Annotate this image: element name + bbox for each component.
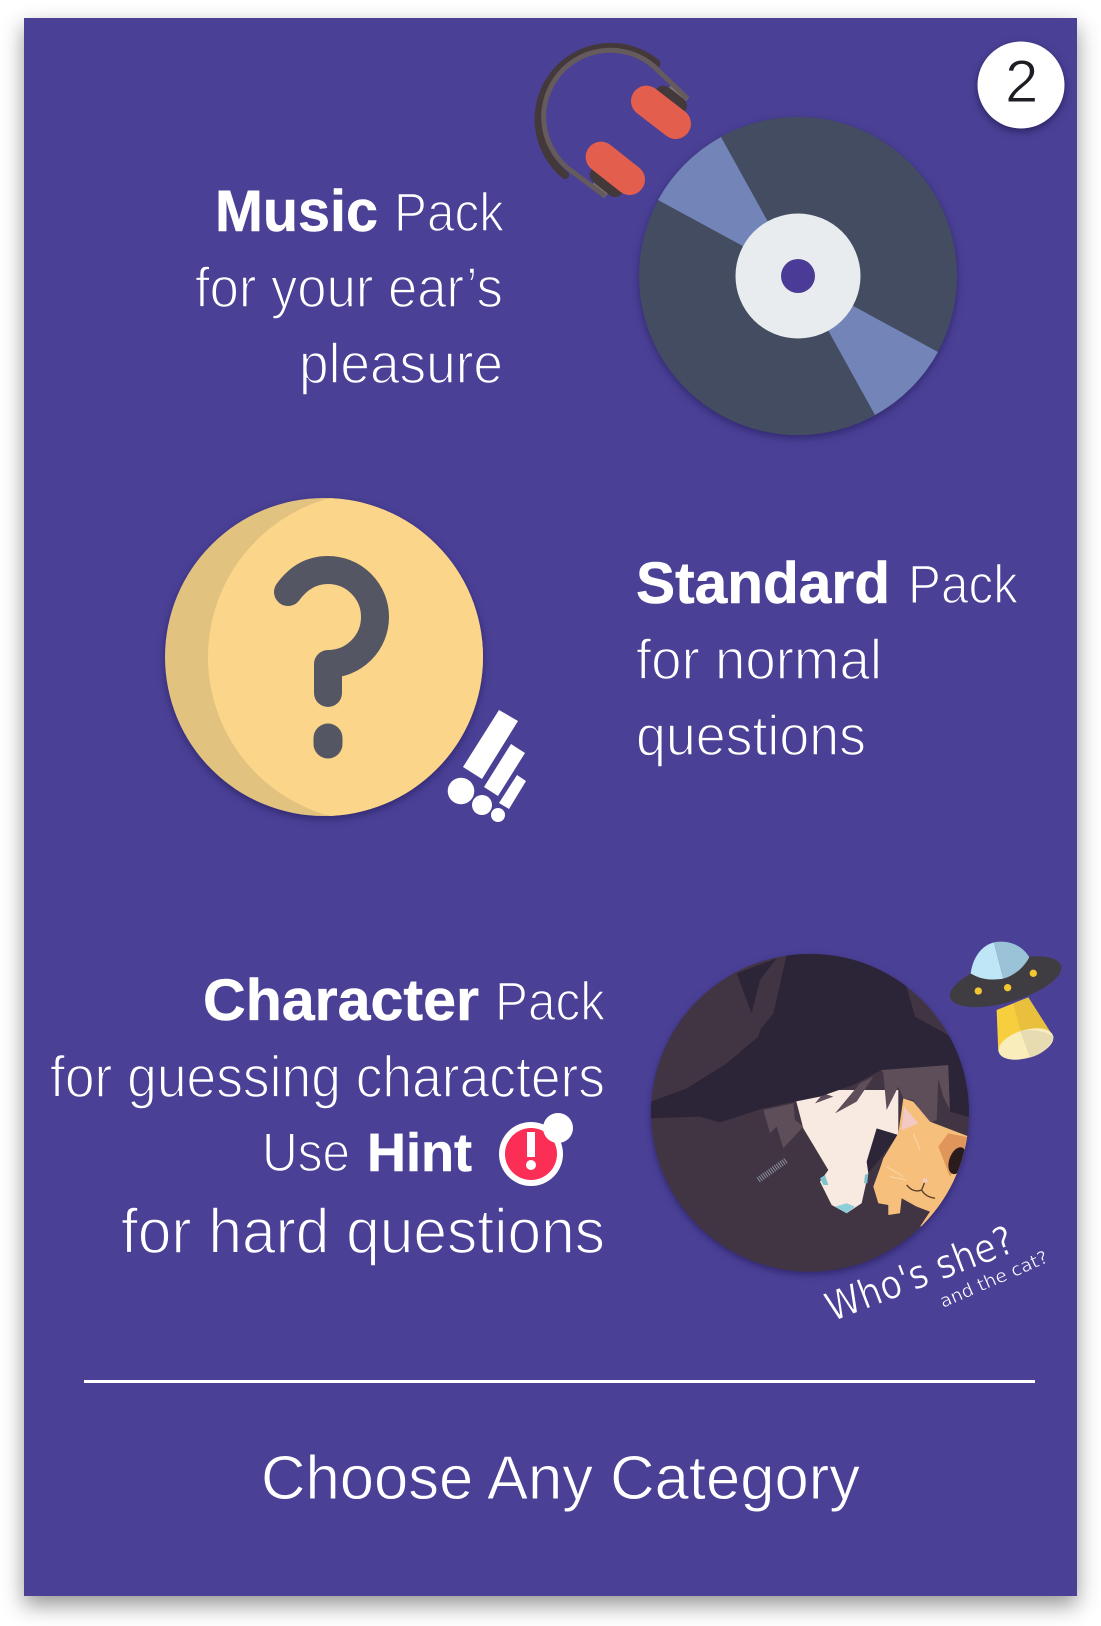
text: music pack: [195, 179, 504, 396]
icon: music disc: [639, 117, 957, 435]
text: who's she: Who's she?: [819, 1217, 1020, 1331]
text: standard pack: questions: [636, 704, 866, 768]
icon: character portrait: [651, 940, 973, 1272]
text: choose any category: Choose Any Category: [261, 1444, 860, 1513]
text: music pack: Music: [215, 179, 378, 244]
icon: headphones: [539, 47, 687, 196]
text: character pack: Character: [203, 968, 479, 1033]
text: music pack: Pack: [394, 181, 504, 243]
icon: ufo: [945, 942, 1067, 1066]
text: standard pack: Standard: [636, 551, 890, 616]
text: and the cat: and the cat?: [937, 1247, 1051, 1313]
icon: hint button: [499, 1113, 573, 1186]
text: standard pack: Pack: [908, 553, 1018, 615]
text: character pack: Use: [262, 1121, 350, 1183]
text: character pack: for hard questions: [121, 1197, 605, 1267]
text: character pack: Hint: [367, 1123, 472, 1183]
text: music pack: for your ear’s: [195, 256, 503, 320]
text: character pack: Pack: [495, 970, 605, 1032]
icon: white exclamation marks: [448, 710, 526, 822]
text: standard pack: for normal: [636, 628, 882, 692]
text: standard pack: [636, 551, 1018, 768]
badge: page number 2: 2: [1005, 48, 1038, 115]
text: music pack: pleasure: [299, 332, 503, 396]
text: character pack: for guessing characters: [50, 1045, 605, 1110]
text: character pack: [50, 968, 605, 1267]
badge: page number 2: [978, 42, 1064, 128]
icon: question coin: [162, 498, 486, 822]
